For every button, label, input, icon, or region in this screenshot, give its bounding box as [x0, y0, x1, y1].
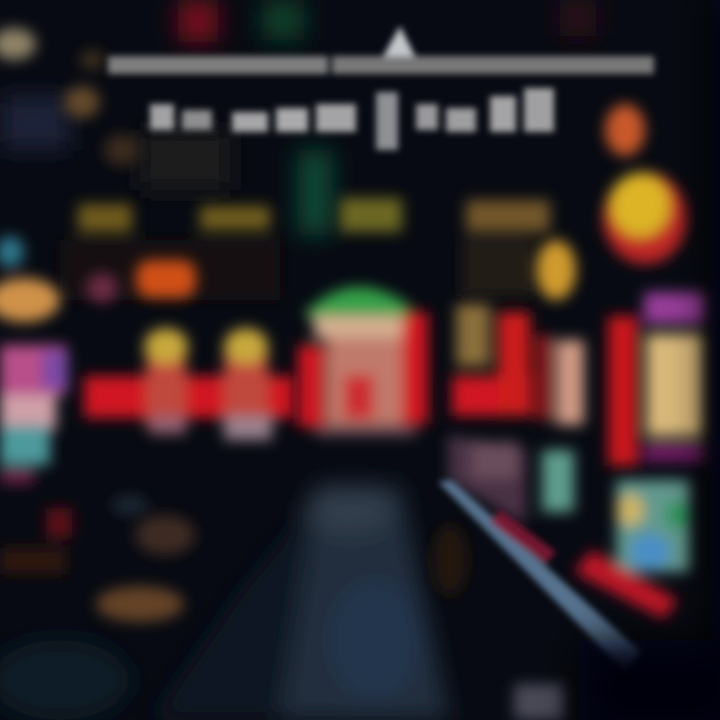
edge vignette: [580, 0, 720, 720]
yellow signs row: [60, 198, 550, 300]
blue diagonal counter: [438, 480, 640, 672]
red machine row: [84, 328, 294, 440]
top left lights: [0, 28, 140, 166]
central green arched machine: [298, 287, 428, 436]
right aisle machines: [448, 435, 574, 525]
lower left stools: [96, 495, 468, 622]
title banner: [108, 26, 654, 150]
floor: [0, 485, 450, 720]
right red machines: [452, 304, 584, 425]
ceiling accents: [0, 0, 596, 235]
far right column: [603, 104, 706, 466]
orange and pink lamps: [86, 240, 576, 303]
left machine: [0, 236, 72, 574]
far right lower multicolor panel: [514, 480, 690, 720]
